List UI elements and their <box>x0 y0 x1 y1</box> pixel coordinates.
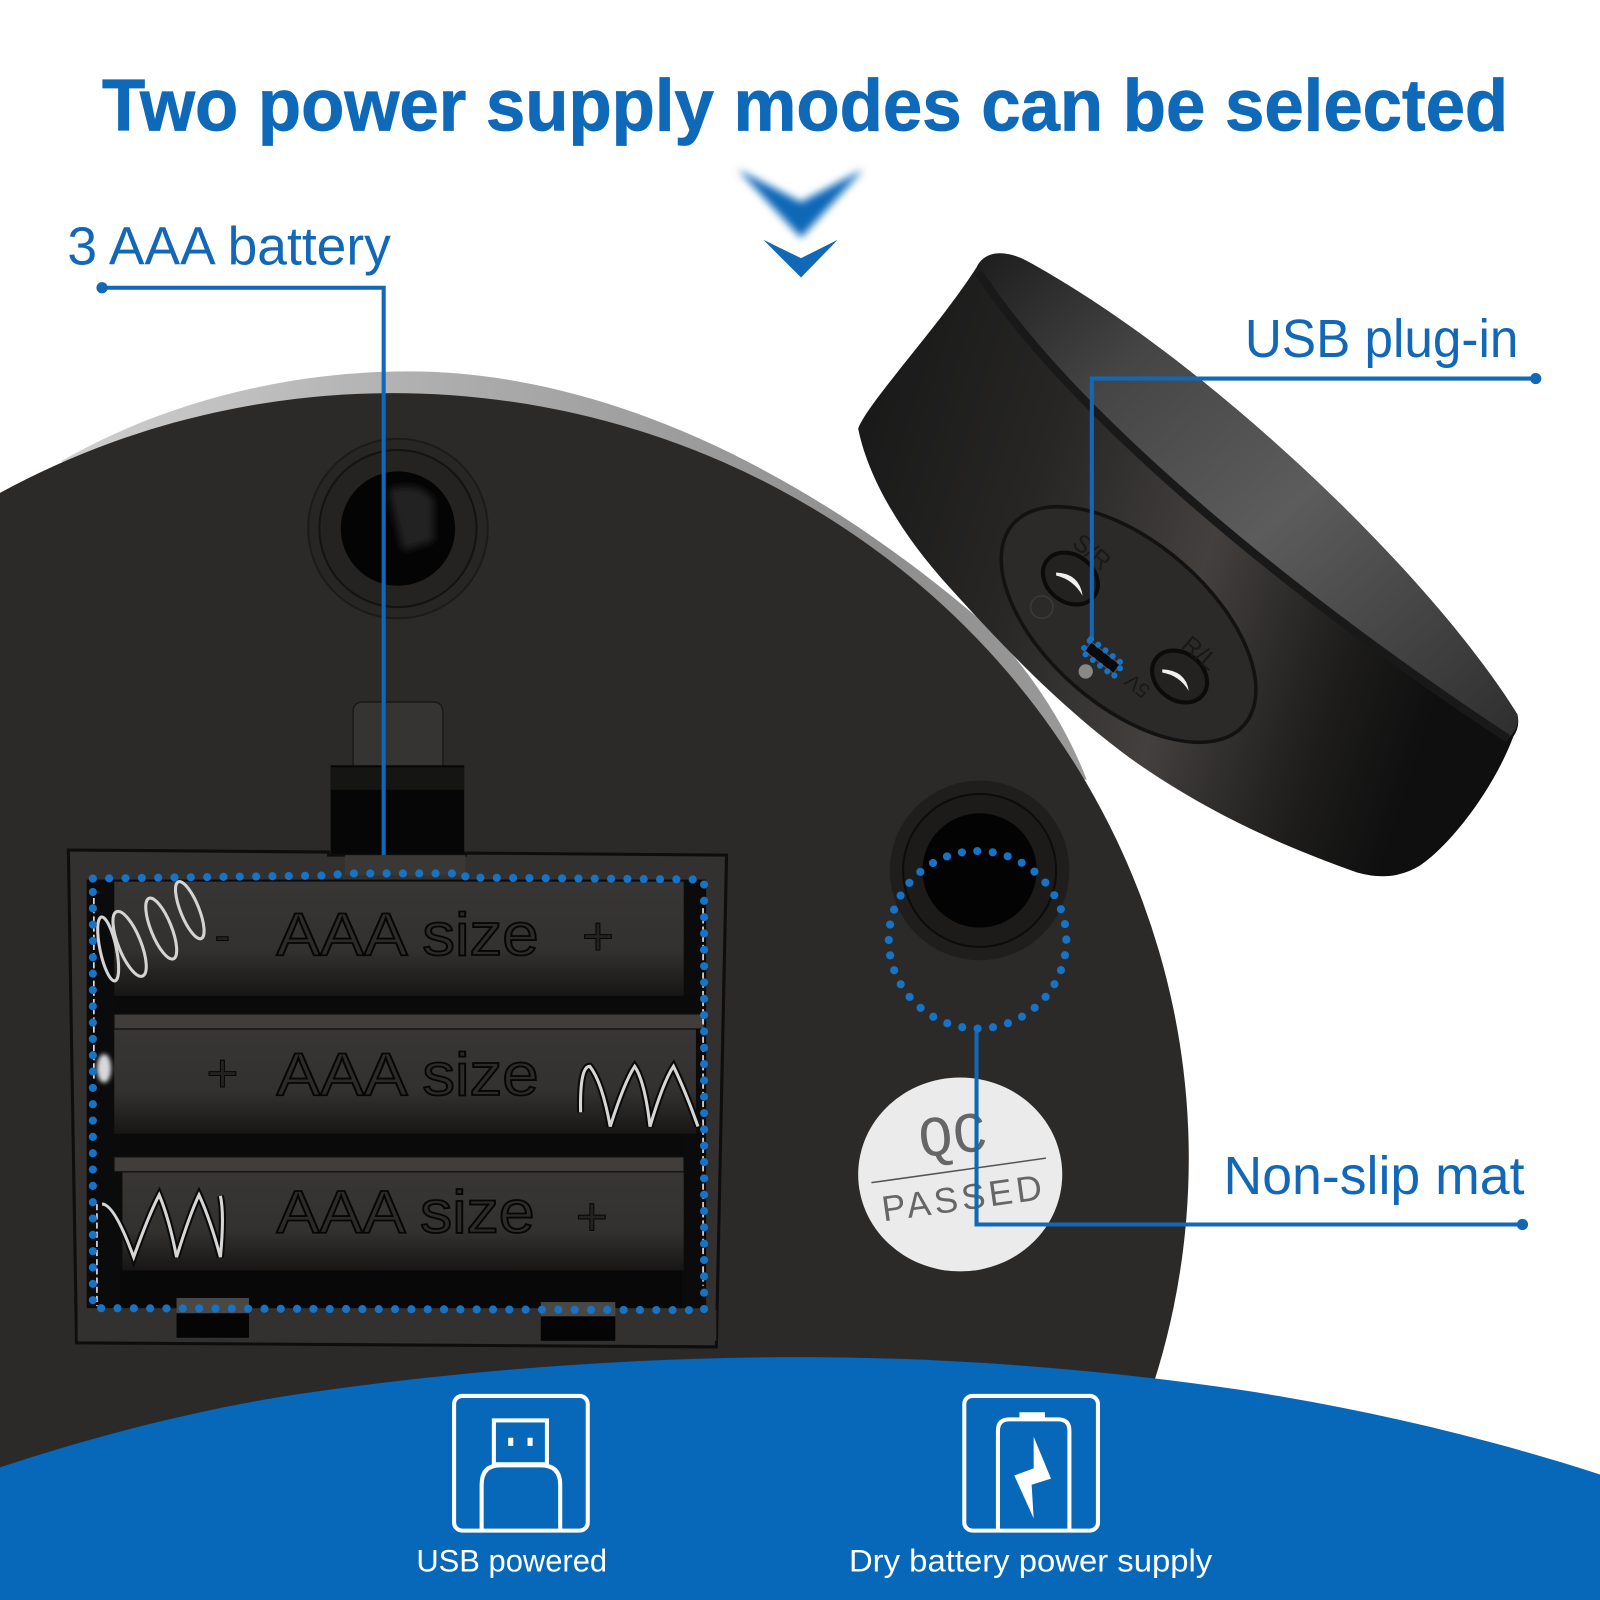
panel label 5V: 5V <box>1121 668 1155 702</box>
battery row 1: AAA size <box>277 901 539 968</box>
divider rib 1 <box>114 996 704 1029</box>
indicator LED <box>1079 664 1093 679</box>
spring row 2 <box>581 1066 698 1127</box>
spring row 3 <box>102 1195 222 1257</box>
label: Dry battery power supply: Dry battery power supply <box>849 1542 1212 1578</box>
QC passed sticker: PASSED <box>879 1167 1044 1229</box>
divider rib 2 <box>114 1134 684 1171</box>
title: Two power supply modes can be selected <box>102 64 1508 147</box>
disc body <box>0 393 1189 1480</box>
puck side <box>858 253 1518 876</box>
lower slot <box>120 1270 682 1307</box>
puck rim line <box>979 272 1508 739</box>
right foot hole <box>890 781 1069 960</box>
battery row 1: - <box>215 909 230 961</box>
battery door latch <box>331 702 464 855</box>
bottom clips <box>177 1298 615 1341</box>
callout: 3 AAA battery <box>67 216 704 1310</box>
top mounting foot hole <box>308 439 488 618</box>
panel: turntable product side view <box>858 253 1518 876</box>
button R/L <box>1142 640 1217 713</box>
battery row 1: + <box>582 905 614 967</box>
icon: USB <box>454 1396 588 1531</box>
battery row 2 <box>114 1030 696 1134</box>
puck top face <box>979 254 1518 739</box>
white side highlights <box>94 898 703 1306</box>
callout: USB plug-in <box>1082 309 1541 676</box>
panel label R/L: R/L <box>1176 631 1223 676</box>
spring row 1 <box>93 878 210 983</box>
battery row 3: AAA size <box>277 1179 535 1246</box>
QC passed sticker: QC <box>915 1103 990 1175</box>
panel: battery compartment <box>68 850 727 1347</box>
callout: 3 AAA battery: 3 AAA battery <box>67 216 391 276</box>
QC passed sticker <box>858 1078 1062 1271</box>
label: USB powered: USB powered <box>416 1542 607 1578</box>
callout: Non-slip mat <box>889 851 1528 1230</box>
battery contact highlight <box>97 1054 111 1083</box>
panel: large base underside <box>0 371 1189 1480</box>
usb port <box>1084 642 1120 673</box>
battery row 2: AAA size <box>277 1041 539 1108</box>
button S <box>1033 542 1108 615</box>
callout: Non-slip mat: Non-slip mat <box>1223 1146 1524 1206</box>
battery row 3: + <box>576 1186 608 1248</box>
panel: bottom blue band <box>0 1357 1600 1600</box>
icon: battery <box>964 1396 1098 1531</box>
battery row 3 <box>122 1172 684 1270</box>
battery row 1 <box>114 882 684 996</box>
icon: double chevron arrow <box>738 169 863 278</box>
battery row 2: + <box>206 1042 239 1104</box>
callout: USB plug-in: USB plug-in <box>1245 309 1518 369</box>
control panel oval <box>959 462 1298 787</box>
disc rim <box>61 371 1087 816</box>
panel label S/R: S/R <box>1067 529 1116 576</box>
power symbol <box>1031 596 1053 618</box>
